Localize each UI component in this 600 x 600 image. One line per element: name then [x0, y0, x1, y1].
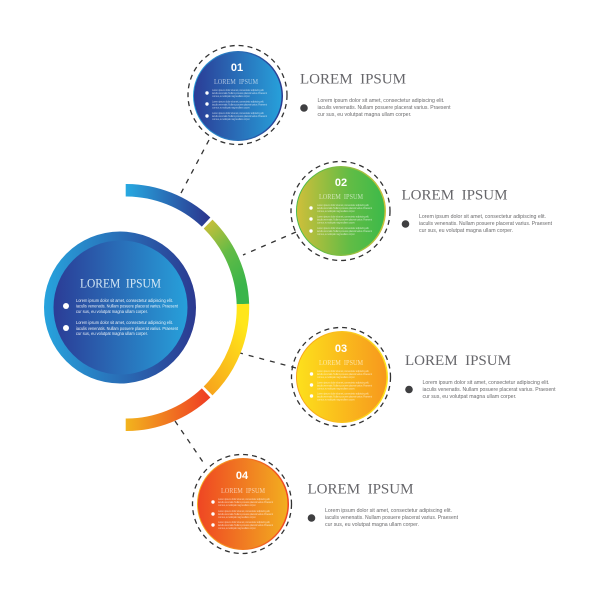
text block: step 04 [308, 482, 459, 528]
bullets and text: Lorem ipsum dolor sit amet, consectetur adipiscing elit. [317, 392, 369, 396]
bullets and text: Lorem ipsum dolor sit amet, consectetur adipiscing elit. [212, 111, 264, 115]
ring fill [193, 51, 283, 141]
body: cur sus, eu volutpat magna ullam corper. [422, 394, 516, 400]
panel: step 01 circle [188, 46, 287, 144]
bullet [402, 220, 409, 228]
text block: step 03 [405, 353, 556, 400]
bullets and text: cur sus, eu volutpat magna ullam corper. [218, 503, 256, 507]
bullets and text: Lorem ipsum dolor sit amet, consectetur adipiscing elit. [218, 497, 270, 501]
bullets and text: iaculis venenatis. Nullam posuere placerat varius. Praesent [317, 372, 372, 376]
bullets and text: Lorem ipsum dolor sit amet, consectetur adipiscing elit. [317, 203, 369, 207]
bullets and text: iaculis venenatis. Nullam posuere placerat varius. Praesent [212, 114, 267, 118]
ring fill [197, 458, 289, 550]
dashed ring [192, 454, 292, 554]
bullet [308, 514, 315, 522]
arc segment: green [208, 224, 243, 304]
heading: LOREM IPSUM [221, 487, 266, 495]
body: iaculis venenatis. Nullam posuere placerat varius. Praesent [422, 387, 556, 393]
body: Lorem ipsum dolor sit amet, consectetur adipiscing elit. [325, 508, 452, 514]
inner fill [297, 167, 384, 255]
connector: step 2 [243, 232, 296, 255]
inner fill [198, 459, 288, 549]
bullets and text: Lorem ipsum dolor sit amet, consectetur adipiscing elit. [212, 100, 264, 104]
dashed ring [291, 162, 390, 260]
bullets and text: cur sus, eu volutpat magna ullam corper. [218, 526, 256, 530]
main text block 2: Lorem ipsum dolor sit amet, consectetur adipiscing elit. [76, 320, 173, 325]
bullets and text [211, 497, 273, 530]
bullets and text: cur sus, eu volutpat magna ullam corper. [317, 398, 355, 402]
body: cur sus, eu volutpat magna ullam corper. [419, 228, 513, 234]
heading: LOREM IPSUM [319, 359, 364, 367]
body: Lorem ipsum dolor sit amet, consectetur adipiscing elit. [419, 214, 546, 220]
bullets and text: cur sus, eu volutpat magna ullam corper. [317, 220, 355, 224]
bullets and text: iaculis venenatis. Nullam posuere placerat varius. Praesent [317, 384, 372, 388]
number: 01 [231, 62, 243, 74]
text block: step 02 [402, 188, 553, 234]
connector: step 1 [180, 140, 209, 195]
dashed ring [292, 328, 390, 426]
bullets and text: cur sus, eu volutpat magna ullam corper. [317, 209, 355, 213]
bullets and text: iaculis venenatis. Nullam posuere placerat varius. Praesent [218, 523, 273, 527]
bullets and text: cur sus, eu volutpat magna ullam corper. [212, 94, 250, 98]
connector: step 4 [175, 421, 205, 465]
bullet [405, 386, 413, 393]
number: 02 [335, 177, 347, 189]
panel: main circle [44, 232, 196, 384]
bullets and text: Lorem ipsum dolor sit amet, consectetur adipiscing elit. [317, 214, 369, 218]
main text block 1: cur sus, eu volutpat magna ullam corper. [76, 309, 148, 314]
bullets and text [310, 369, 372, 402]
bullets and text: Lorem ipsum dolor sit amet, consectetur adipiscing elit. [218, 509, 270, 513]
inner fill [194, 52, 282, 140]
bullets and text: Lorem ipsum dolor sit amet, consectetur adipiscing elit. [317, 380, 369, 384]
bullets and text: iaculis venenatis. Nullam posuere placerat varius. Praesent [317, 206, 372, 210]
main circle ring [44, 232, 196, 384]
bullet [300, 104, 308, 112]
body: cur sus, eu volutpat magna ullam corper. [325, 522, 419, 528]
arc segment: yellow [208, 304, 243, 391]
heading: LOREM IPSUM [300, 72, 406, 88]
arc segment: blue [126, 190, 206, 222]
bullets and text: iaculis venenatis. Nullam posuere placerat varius. Praesent [212, 91, 267, 95]
main text block 2: iaculis venenatis. Nullam posuere placerat varius. Praesent [76, 326, 179, 331]
bullets and text [309, 203, 372, 236]
text block: step 01 [300, 72, 451, 118]
bullets and text: Lorem ipsum dolor sit amet, consectetur adipiscing elit. [317, 226, 369, 230]
bullets and text: cur sus, eu volutpat magna ullam corper. [218, 515, 256, 519]
body: Lorem ipsum dolor sit amet, consectetur adipiscing elit. [318, 98, 444, 104]
bullets and text: iaculis venenatis. Nullam posuere placerat varius. Praesent [218, 500, 273, 504]
bullets and text: Lorem ipsum dolor sit amet, consectetur adipiscing elit. [218, 520, 270, 524]
dashed ring [188, 46, 287, 144]
panel: step 04 circle [192, 454, 292, 554]
bullet [63, 325, 69, 331]
body: Lorem ipsum dolor sit amet, consectetur adipiscing elit. [422, 380, 550, 386]
body: iaculis venenatis. Nullam posuere placerat varius. Praesent [419, 221, 553, 227]
bullets and text: Lorem ipsum dolor sit amet, consectetur adipiscing elit. [212, 88, 264, 92]
bullets and text: iaculis venenatis. Nullam posuere placerat varius. Praesent [317, 218, 372, 222]
heading: LOREM IPSUM [402, 188, 508, 204]
bullets and text: iaculis venenatis. Nullam posuere placerat varius. Praesent [218, 512, 273, 516]
body: iaculis venenatis. Nullam posuere placerat varius. Praesent [318, 105, 451, 111]
heading: LOREM IPSUM [214, 78, 259, 86]
bullets and text [205, 88, 267, 121]
bullets and text: Lorem ipsum dolor sit amet, consectetur adipiscing elit. [317, 369, 369, 373]
inner fill [297, 332, 386, 422]
number: 04 [236, 470, 249, 482]
panel: step 02 circle [291, 162, 390, 260]
heading: LOREM IPSUM [308, 482, 414, 498]
number: 03 [335, 343, 347, 355]
bullets and text: cur sus, eu volutpat magna ullam corper. [212, 106, 250, 110]
bullet [63, 303, 69, 309]
main text block 1: iaculis venenatis. Nullam posuere placerat varius. Praesent [76, 304, 179, 309]
heading: LOREM IPSUM [405, 353, 511, 369]
bullets and text: cur sus, eu volutpat magna ullam corper. [317, 375, 355, 379]
segmented arc [126, 190, 243, 425]
heading: LOREM IPSUM [319, 193, 364, 201]
bullets and text: iaculis venenatis. Nullam posuere placerat varius. Praesent [317, 394, 372, 398]
ring fill [296, 331, 388, 423]
main text block 1: Lorem ipsum dolor sit amet, consectetur adipiscing elit. [76, 298, 173, 303]
panel: step 03 circle [292, 328, 390, 426]
body: cur sus, eu volutpat magna ullam corper. [318, 112, 412, 118]
connector: step 3 [240, 353, 296, 368]
bullets and text: cur sus, eu volutpat magna ullam corper. [212, 117, 250, 121]
main circle inner [54, 240, 188, 374]
bullets and text: iaculis venenatis. Nullam posuere placerat varius. Praesent [212, 102, 267, 106]
bullets and text: iaculis venenatis. Nullam posuere placerat varius. Praesent [317, 229, 372, 233]
ring fill [296, 166, 386, 256]
main text block 2: cur sus, eu volutpat magna ullam corper. [76, 331, 148, 336]
main heading: LOREM IPSUM [80, 276, 161, 291]
arc segment: orange [126, 393, 206, 425]
bullets and text: cur sus, eu volutpat magna ullam corper. [317, 386, 355, 390]
bullets and text: cur sus, eu volutpat magna ullam corper. [317, 232, 355, 236]
body: iaculis venenatis. Nullam posuere placerat varius. Praesent [325, 515, 459, 521]
